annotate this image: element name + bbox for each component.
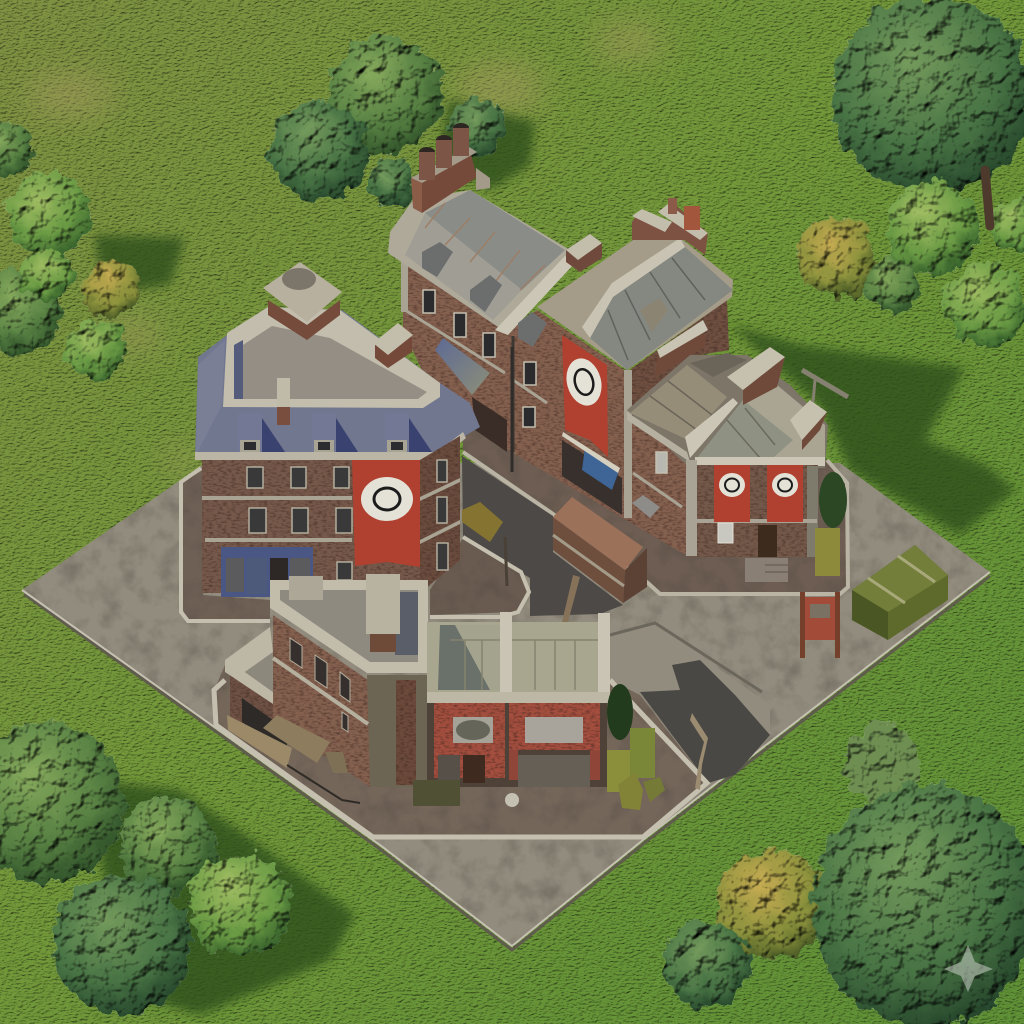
- shop roof: [427, 622, 610, 702]
- dark arched shopfront: [472, 397, 507, 452]
- iron railing: [287, 765, 360, 803]
- stone band: [695, 457, 825, 466]
- building: south block: [225, 574, 610, 787]
- green ammo crate: [852, 545, 948, 640]
- parapet block: [727, 347, 785, 405]
- plaza shadow: [610, 623, 770, 783]
- dormers: [422, 242, 547, 347]
- south block stone band: [273, 658, 368, 724]
- mansard left panel: [196, 340, 225, 455]
- antenna: [802, 370, 848, 402]
- lamp post: [510, 347, 514, 472]
- shrub and crates by shop: [607, 684, 665, 810]
- east wing base fill: [627, 355, 828, 468]
- east wing window: [718, 523, 733, 543]
- roof right section: [537, 238, 733, 370]
- mansard slate roof: [195, 307, 480, 457]
- trees: bottom left: [0, 722, 292, 1015]
- rubble: [505, 793, 519, 807]
- west block brick front: [202, 460, 420, 593]
- shop wall: [427, 703, 607, 787]
- blue awning: [435, 338, 490, 395]
- south block annex: [230, 675, 287, 765]
- west block windows: [247, 460, 448, 580]
- timber crate in courtyard: [553, 497, 647, 603]
- benches beside south block: [227, 715, 348, 773]
- chimney stack right: [632, 198, 708, 255]
- red signboard: [800, 592, 840, 658]
- stone bands: [202, 478, 460, 544]
- trees: top right: [798, 0, 1024, 347]
- rear terrace brick wall: [403, 262, 690, 555]
- east wing door: [758, 525, 777, 557]
- roof turret: [263, 262, 342, 340]
- rear windows: [423, 290, 667, 473]
- banner: rear terrace: [561, 335, 608, 457]
- tree: top centre: [268, 37, 506, 207]
- south-east pavement patch: [430, 537, 529, 617]
- building: rear terrace: [388, 123, 733, 555]
- concrete base: [22, 463, 990, 950]
- south block parapet and roof: [270, 580, 428, 673]
- brick chimney block: [655, 320, 708, 377]
- steps and crates by east wing: [745, 472, 847, 582]
- east wing concrete roof base: [697, 385, 825, 465]
- east sidewalk: [463, 420, 848, 594]
- parapet block right: [790, 400, 827, 450]
- stack on mansard: [277, 378, 290, 425]
- roof chimneys: [373, 323, 413, 368]
- shop door: [438, 755, 460, 780]
- roof hatch: [289, 574, 400, 652]
- dark crate at shop front: [413, 780, 460, 806]
- sign panels: [453, 717, 493, 743]
- east wing roof A: [630, 365, 727, 440]
- sparkle mark: [944, 945, 993, 992]
- east wing front wall: [690, 465, 818, 557]
- trees: bottom right: [663, 724, 1024, 1024]
- small awning: [632, 495, 660, 518]
- flat roof surface: [243, 326, 427, 399]
- blue shopfront: [221, 547, 313, 597]
- banners: east wing: [714, 465, 803, 522]
- roof dormers: [238, 413, 432, 452]
- east wing roof B: [697, 400, 793, 458]
- small yellow crates: [462, 502, 503, 542]
- right brick wall: [627, 300, 729, 420]
- courtyard post: [562, 575, 580, 622]
- parapet: [223, 307, 440, 408]
- south block windows: [290, 638, 350, 732]
- trees: left side: [0, 122, 142, 380]
- south pavement: [214, 665, 707, 837]
- building: east wing: [627, 347, 828, 557]
- leaning signpost: [690, 713, 708, 790]
- banner: west block: [352, 460, 420, 567]
- stone quoins: [401, 262, 632, 518]
- west block brick side: [420, 436, 460, 593]
- stone bands: [405, 310, 682, 507]
- west sidewalk: [181, 468, 270, 621]
- roller shutter: [518, 755, 590, 787]
- tree trunk: [985, 170, 990, 226]
- east wing flat rear roof: [690, 353, 747, 377]
- asphalt road: [462, 456, 623, 616]
- building: west block: [195, 262, 480, 597]
- courtyard street post: [505, 537, 507, 586]
- eaves band: [195, 432, 466, 460]
- small chimney: [566, 234, 602, 272]
- chimney stack left: [411, 123, 490, 213]
- south block corner: [367, 675, 427, 787]
- lower shop: [562, 432, 622, 515]
- red brick panels: [434, 703, 505, 778]
- south block brick wall: [273, 615, 370, 787]
- roof left section: [388, 190, 575, 335]
